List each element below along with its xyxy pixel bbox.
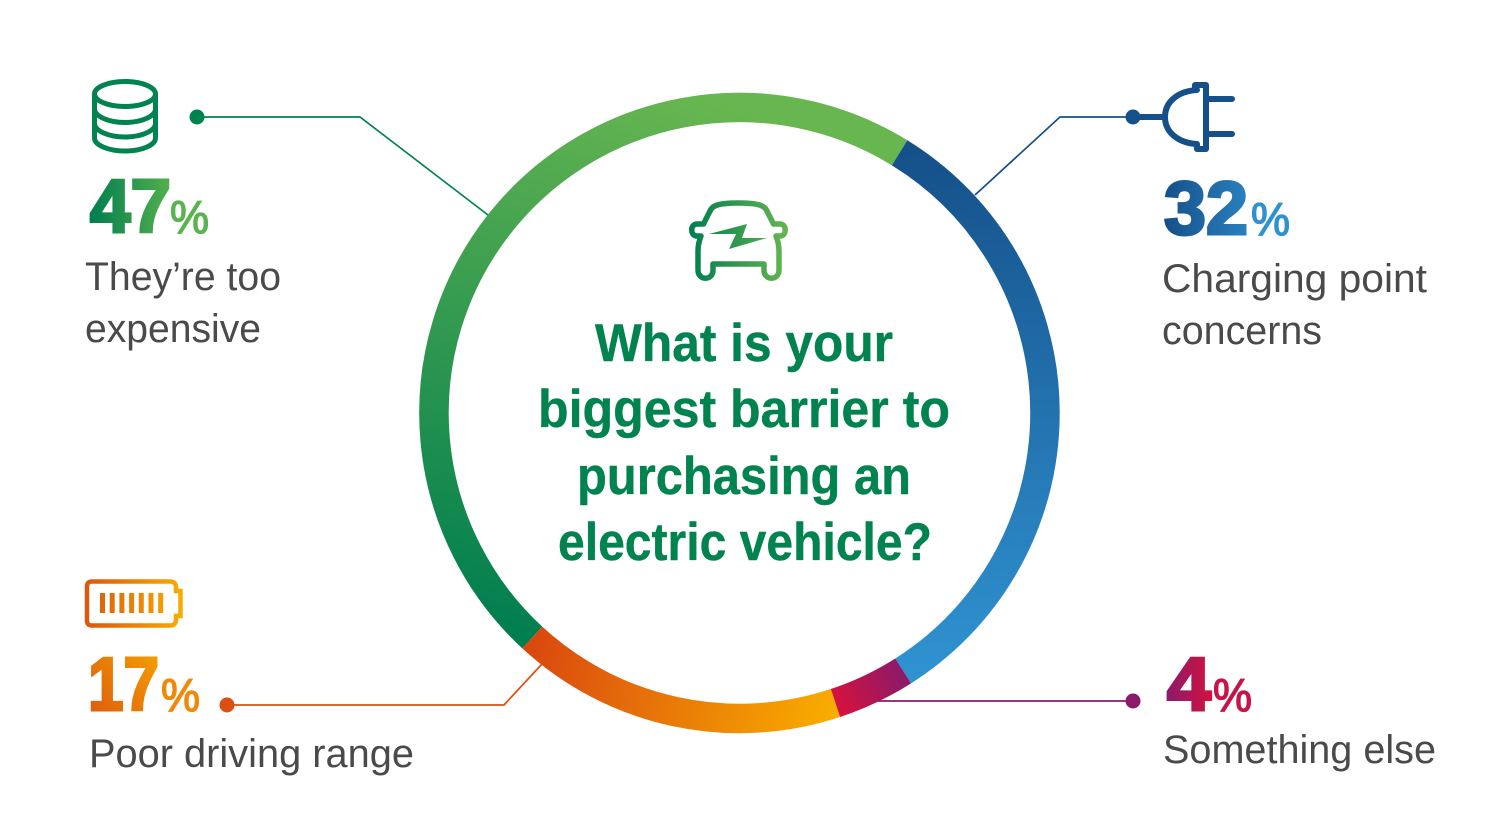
label: They’re too xyxy=(85,255,281,299)
figure 47%: % xyxy=(170,191,209,243)
leader line: driving range xyxy=(220,664,542,712)
stat: 32% charging point concerns xyxy=(1162,166,1427,353)
donut ring chart xyxy=(434,107,1045,718)
central question: purchasing an xyxy=(577,447,911,506)
central question: electric vehicle? xyxy=(558,513,932,572)
icon: electric car xyxy=(692,203,785,278)
stat: 4% something else xyxy=(1163,642,1436,772)
figure 17%: 17 xyxy=(88,642,159,726)
figure 32%: % xyxy=(1251,193,1290,245)
ring segment: too expensive 47% xyxy=(434,107,900,638)
label xyxy=(85,255,281,351)
ring segment: something else 4% xyxy=(835,671,903,703)
figure 4%: % xyxy=(1213,669,1252,721)
leader line: charging point xyxy=(975,110,1140,195)
label: Poor driving range xyxy=(89,732,414,776)
figure 32% xyxy=(1164,166,1290,250)
figure 4% xyxy=(1167,642,1252,726)
figure 4%: 4 xyxy=(1167,642,1211,726)
label: concerns xyxy=(1162,309,1322,353)
icon: plug xyxy=(1140,85,1232,149)
figure 32%: 32 xyxy=(1164,166,1248,250)
icon: stack of coins xyxy=(94,82,156,151)
central question xyxy=(538,314,950,572)
label xyxy=(1162,257,1427,353)
stat: 47% they're too expensive xyxy=(85,164,281,351)
leader line: something else xyxy=(878,694,1140,708)
label: expensive xyxy=(85,307,261,351)
icon: battery xyxy=(87,582,180,626)
figure 47%: 47 xyxy=(90,164,171,248)
icon: lightning bolt xyxy=(709,224,767,249)
label: Something else xyxy=(1163,728,1436,772)
leader line: too expensive xyxy=(190,110,488,215)
ring segment: poor driving range 17% xyxy=(532,638,835,718)
stat: 17% poor driving range xyxy=(88,642,414,776)
central question: biggest barrier to xyxy=(538,380,950,439)
central question: What is your xyxy=(595,314,893,373)
figure 17%: % xyxy=(161,669,200,721)
label: Charging point xyxy=(1162,257,1427,301)
ring segment: charging point concerns 32% xyxy=(900,153,1045,671)
